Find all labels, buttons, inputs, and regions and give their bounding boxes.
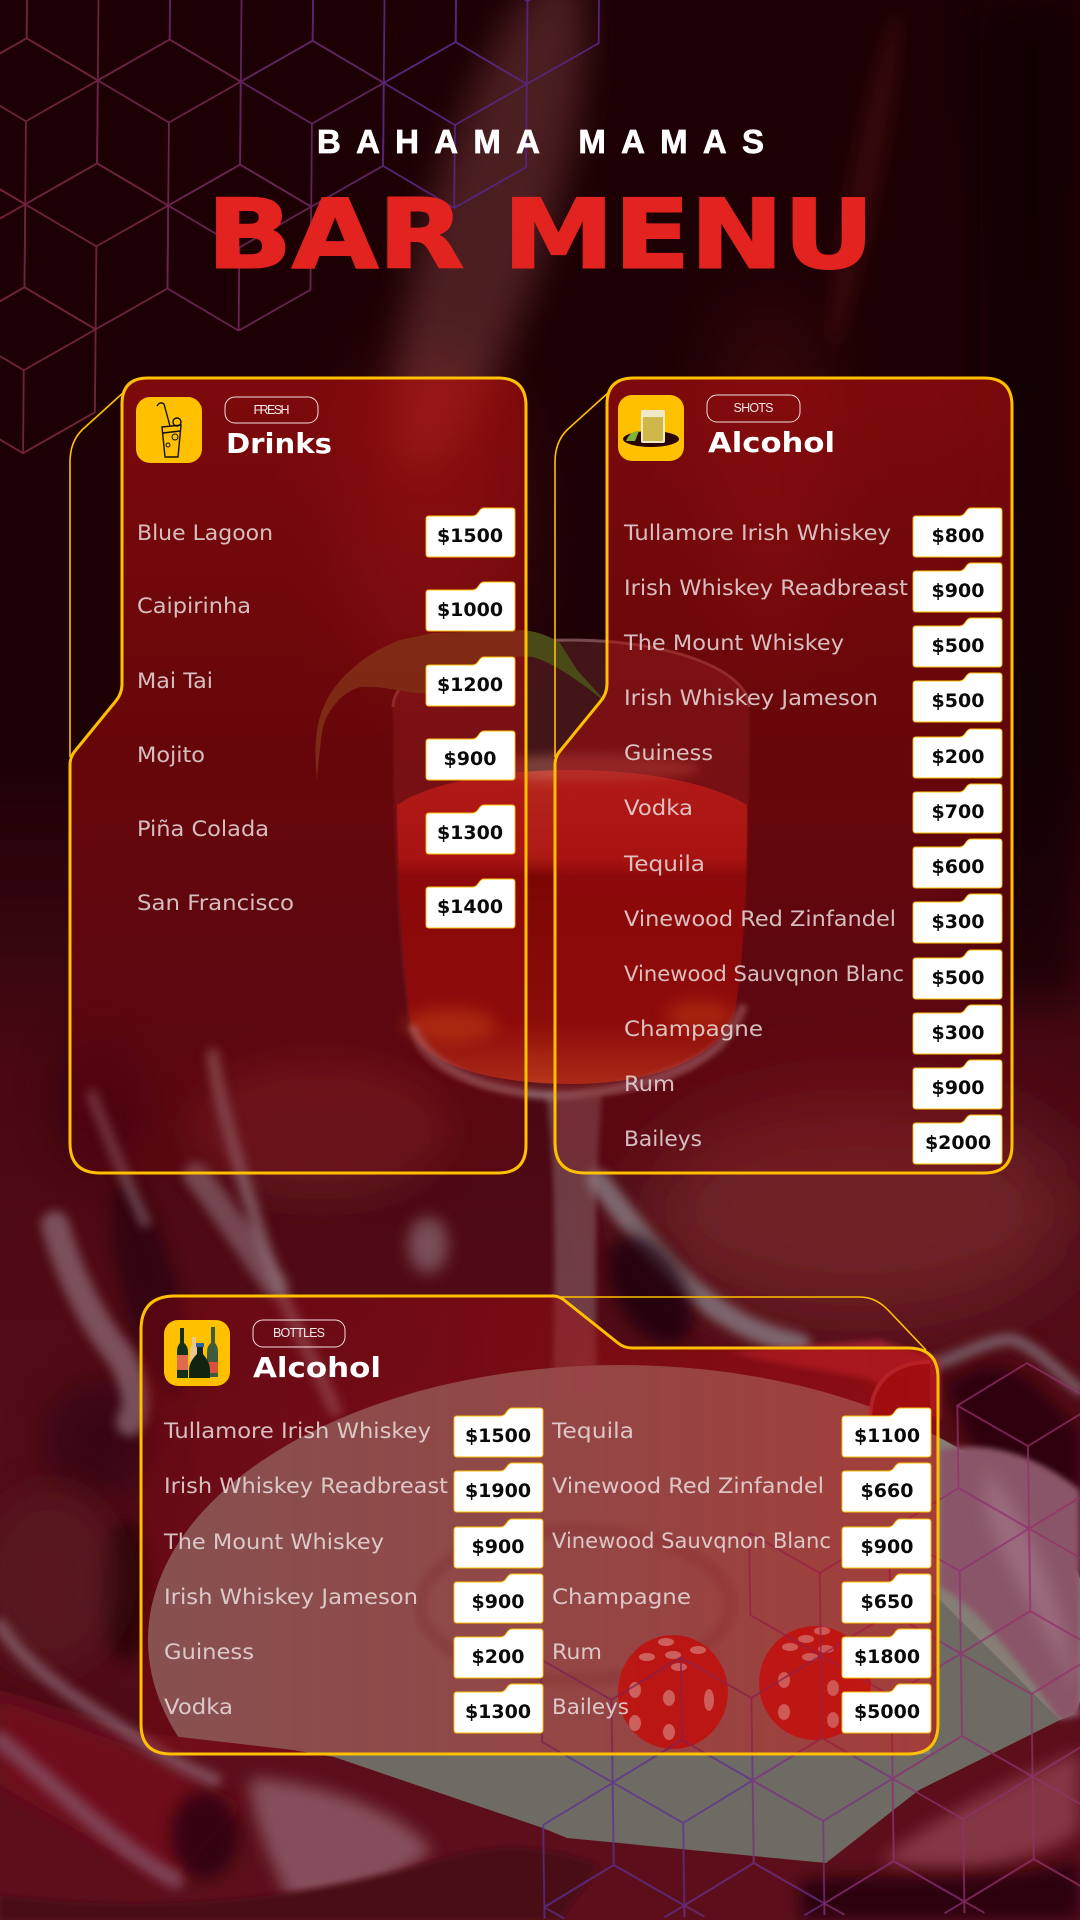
menu row: Irish Whiskey Jameson: $900: [472, 1591, 524, 1613]
menu row: Baileys: $2000: [925, 1132, 991, 1154]
menu row: Vinewood Red Zinfandel: Vinewood Red Zinfandel: [552, 1474, 824, 1498]
menu row: Pina Colada: Piña Colada: [137, 817, 269, 841]
tag: bottles: BOTTLES: [273, 1326, 325, 1340]
menu row: Irish Whiskey Jameson: $500: [932, 690, 984, 712]
menu row: Rum: $1800: [854, 1646, 920, 1668]
menu row: Blue Lagoon: $1500: [437, 525, 503, 547]
menu row: Vinewood Sauvqnon Blanc: [624, 950, 1002, 999]
menu row: San Francisco: $1400: [437, 896, 503, 918]
menu row: The Mount Whiskey: [623, 618, 1002, 667]
menu row: Vinewood Red Zinfandel: $660: [861, 1480, 913, 1502]
menu row: The Mount Whiskey: The Mount Whiskey: [623, 631, 844, 655]
menu row: Irish Whiskey Readbreast: [164, 1463, 543, 1512]
menu row: Rum: Rum: [624, 1072, 675, 1096]
icon: bottles: [164, 1320, 230, 1386]
menu row: Vinewood Sauvqnon Blanc: $900: [861, 1536, 913, 1558]
menu row: Irish Whiskey Readbreast: $900: [932, 580, 984, 602]
tag: shots: [707, 395, 800, 422]
menu row: Vodka: [624, 784, 1002, 833]
menu row: Caipirinha: $1000: [437, 599, 503, 621]
menu row: Tullamore Irish Whiskey: $800: [932, 525, 984, 547]
menu row: Tullamore Irish Whiskey: Tullamore Irish Whiskey: [163, 1419, 431, 1443]
hexagon pattern: bottom right: [537, 1361, 1080, 1919]
menu row: Vodka: $1300: [465, 1701, 531, 1723]
tag: shots: SHOTS: [734, 401, 774, 415]
menu row: Mai Tai: $1200: [437, 674, 503, 696]
heading: alcohol: Alcohol: [708, 426, 835, 459]
menu row: Vinewood Red Zinfandel: [624, 894, 1002, 943]
menu row: Blue Lagoon: [137, 508, 515, 557]
menu row: Caipirinha: [137, 582, 515, 631]
menu row: Champagne: [624, 1005, 1002, 1054]
menu row: Guiness: $200: [932, 746, 984, 768]
menu row: Vodka: Vodka: [624, 796, 693, 820]
menu row: Guiness: [164, 1629, 543, 1678]
dice: [618, 1635, 728, 1749]
menu row: Mai Tai: [137, 657, 515, 706]
menu row: Vinewood Red Zinfandel: Vinewood Red Zinfandel: [624, 907, 896, 931]
menu row: Tequila: $600: [932, 856, 984, 878]
heading: drinks: Drinks: [226, 427, 332, 460]
menu row: Irish Whiskey Readbreast: $1900: [465, 1480, 531, 1502]
menu row: Rum: [624, 1060, 1002, 1109]
menu row: Champagne: $300: [932, 1022, 984, 1044]
menu row: Baileys: Baileys: [552, 1695, 629, 1719]
title: restaurant name: BAHAMA MAMAS: [317, 123, 764, 160]
menu row: Vodka: $700: [932, 801, 984, 823]
menu row: The Mount Whiskey: $900: [472, 1536, 524, 1558]
menu row: Mojito: [137, 731, 515, 780]
menu row: San Francisco: San Francisco: [137, 891, 294, 915]
menu row: Vinewood Sauvqnon Blanc: Vinewood Sauvqnon Blanc: [624, 962, 904, 986]
menu row: Vodka: [164, 1684, 543, 1733]
menu row: Guiness: [624, 729, 1002, 778]
menu row: Tullamore Irish Whiskey: $1500: [465, 1425, 531, 1447]
icon: drink glass: [136, 397, 202, 463]
cocktail glass stem: [546, 1095, 602, 1400]
menu row: Irish Whiskey Jameson: [624, 673, 1002, 722]
panel: alcohol bottles: [141, 1296, 938, 1754]
menu row: Baileys: Baileys: [624, 1127, 702, 1151]
menu row: The Mount Whiskey: The Mount Whiskey: [163, 1530, 384, 1554]
panel: alcohol shots: [555, 378, 1012, 1173]
red silk lower fold: [0, 1690, 1080, 1920]
menu row: Vinewood Sauvqnon Blanc: Vinewood Sauvqnon Blanc: [552, 1529, 831, 1553]
leaf garnish: [316, 630, 607, 780]
menu row: Caipirinha: Caipirinha: [137, 594, 251, 618]
menu row: The Mount Whiskey: $500: [932, 635, 984, 657]
menu row: Vodka: Vodka: [164, 1695, 233, 1719]
menu row: Guiness: Guiness: [624, 741, 713, 765]
icon: shot glass: [618, 395, 684, 461]
menu row: Mai Tai: Mai Tai: [137, 669, 213, 693]
title: bar menu: BAR MENU: [207, 180, 874, 290]
menu row: The Mount Whiskey: [163, 1519, 543, 1568]
menu row: Guiness: $200: [472, 1646, 524, 1668]
menu row: Irish Whiskey Jameson: [164, 1574, 543, 1623]
menu row: Tequila: [623, 839, 1002, 888]
menu row: Blue Lagoon: Blue Lagoon: [137, 521, 273, 545]
silk highlights: [55, 1055, 1080, 1422]
menu row: Tullamore Irish Whiskey: [163, 1408, 543, 1457]
menu row: Champagne: [552, 1574, 931, 1623]
tag: fresh: FRESH: [254, 403, 290, 417]
menu row: Baileys: [624, 1115, 1002, 1164]
hexagon pattern: top left: [0, 0, 600, 458]
menu row: Tullamore Irish Whiskey: Tullamore Irish Whiskey: [623, 521, 891, 545]
panel: drinks: [70, 378, 526, 1173]
menu row: Champagne: $650: [861, 1591, 913, 1613]
cocktail glass bowl: [393, 640, 749, 1098]
menu row: Tequila: Tequila: [551, 1419, 634, 1443]
menu row: Baileys: [552, 1684, 931, 1733]
menu row: Vinewood Sauvqnon Blanc: [552, 1519, 931, 1568]
menu row: Rum: Rum: [552, 1640, 602, 1664]
menu row: Champagne: Champagne: [624, 1017, 763, 1041]
menu row: Tullamore Irish Whiskey: [623, 508, 1002, 557]
tag: bottles: [253, 1320, 345, 1347]
menu row: Mojito: Mojito: [137, 743, 205, 767]
menu row: Pina Colada: [137, 805, 515, 854]
menu row: Baileys: $5000: [854, 1701, 920, 1723]
menu row: San Francisco: [137, 879, 515, 928]
right silk cushion: [940, 1446, 1080, 1720]
menu row: Tequila: $1100: [854, 1425, 920, 1447]
menu row: Mojito: $900: [444, 748, 496, 770]
menu row: Pina Colada: $1300: [437, 822, 503, 844]
plate and napkin: [148, 1365, 1080, 1915]
menu row: Irish Whiskey Readbreast: Irish Whiskey Readbreast: [164, 1474, 448, 1498]
menu row: Tequila: Tequila: [623, 852, 705, 876]
menu row: Rum: [552, 1629, 931, 1678]
heading: alcohol: Alcohol: [253, 1351, 381, 1384]
menu row: Irish Whiskey Readbreast: [624, 563, 1002, 612]
menu row: Rum: $900: [932, 1077, 984, 1099]
menu row: Tequila: [551, 1408, 931, 1457]
tag: fresh: [225, 397, 318, 423]
menu row: Vinewood Sauvqnon Blanc: $500: [932, 967, 984, 989]
menu row: Champagne: Champagne: [552, 1585, 691, 1609]
menu row: Vinewood Red Zinfandel: [552, 1463, 931, 1512]
menu row: Irish Whiskey Jameson: Irish Whiskey Jameson: [624, 686, 878, 710]
menu row: Guiness: Guiness: [164, 1640, 254, 1664]
menu row: Vinewood Red Zinfandel: $300: [932, 911, 984, 933]
menu row: Irish Whiskey Readbreast: Irish Whiskey Readbreast: [624, 576, 908, 600]
menu row: Irish Whiskey Jameson: Irish Whiskey Jameson: [164, 1585, 418, 1609]
